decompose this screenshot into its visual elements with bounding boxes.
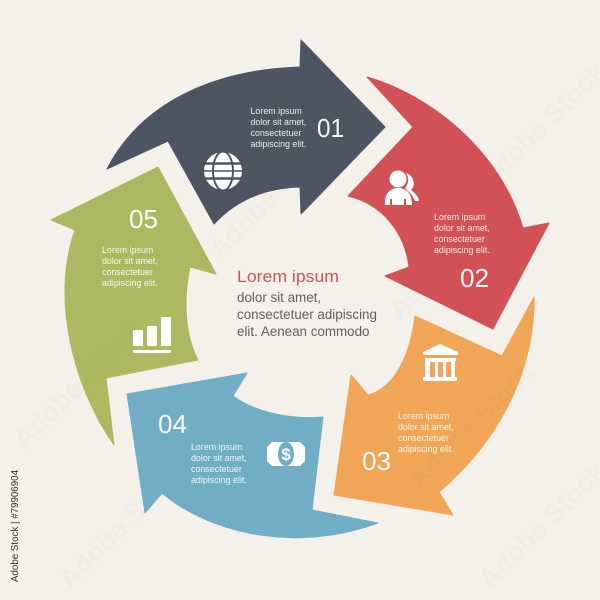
text: step 02 description: consectetuer: [434, 234, 485, 244]
watermark text: Adobe Stock: [403, 356, 542, 494]
stock id caption: Adobe Stock | #79906904: [9, 470, 21, 582]
text: step 02 description: dolor sit amet,: [434, 223, 490, 233]
arrow 03: orange: [334, 297, 534, 515]
watermark text: Adobe Stock: [53, 456, 192, 594]
text: step 03 description: Lorem ipsum: [398, 411, 449, 421]
watermark text: Adobe Stock: [203, 126, 342, 264]
text: step 05 description: consectetuer: [102, 267, 153, 277]
number 02: 02: [460, 263, 489, 293]
text: step 04 description: Lorem ipsum: [191, 442, 242, 452]
arrow 01: dark slate: [107, 40, 385, 224]
icon: people: [385, 170, 419, 205]
central body text: elit. Aenean commodo: [237, 324, 370, 339]
text: step 01 description: adipiscing elit.: [250, 139, 306, 149]
icon: globe: [203, 152, 243, 190]
arrow 05: green: [51, 167, 216, 445]
text: step 01 description: dolor sit amet,: [250, 117, 306, 127]
number 05: 05: [129, 204, 158, 234]
text: step 02 description: Lorem ipsum: [434, 212, 485, 222]
central body text: consectetuer adipiscing: [237, 307, 377, 322]
text: step 03 description: consectetuer: [398, 433, 449, 443]
text: step 04 description: consectetuer: [191, 464, 242, 474]
text: step 05 description: Lorem ipsum: [102, 245, 153, 255]
text: step 04 description: adipiscing elit.: [191, 475, 247, 485]
icon: bar chart: [133, 317, 171, 353]
text: step 03 description: dolor sit amet,: [398, 422, 454, 432]
number 04: 04: [158, 409, 187, 439]
text: step 04 description: dolor sit amet,: [191, 453, 247, 463]
text: step 01 description: Lorem ipsum: [250, 106, 302, 116]
central heading: Lorem ipsum: [237, 267, 339, 286]
icon: bank: [423, 344, 458, 381]
watermark text: Adobe Stock: [383, 186, 522, 324]
text: step 05 description: dolor sit amet,: [102, 256, 158, 266]
arrow 04: blue: [127, 373, 378, 538]
icon: banknote: $: [281, 445, 291, 464]
text: step 02 description: adipiscing elit.: [434, 245, 490, 255]
icon: banknote: [267, 442, 305, 466]
text: step 03 description: adipiscing elit.: [398, 444, 454, 454]
number 03: 03: [362, 446, 391, 476]
number 01: 01: [317, 113, 344, 143]
arrow 02: red: [348, 77, 549, 329]
central text block: [237, 267, 377, 339]
text: step 05 description: adipiscing elit.: [102, 278, 158, 288]
watermark text: Adobe Stock: [8, 316, 147, 454]
text: step 01 description: consectetuer: [250, 128, 301, 138]
central body text: dolor sit amet,: [237, 290, 321, 305]
